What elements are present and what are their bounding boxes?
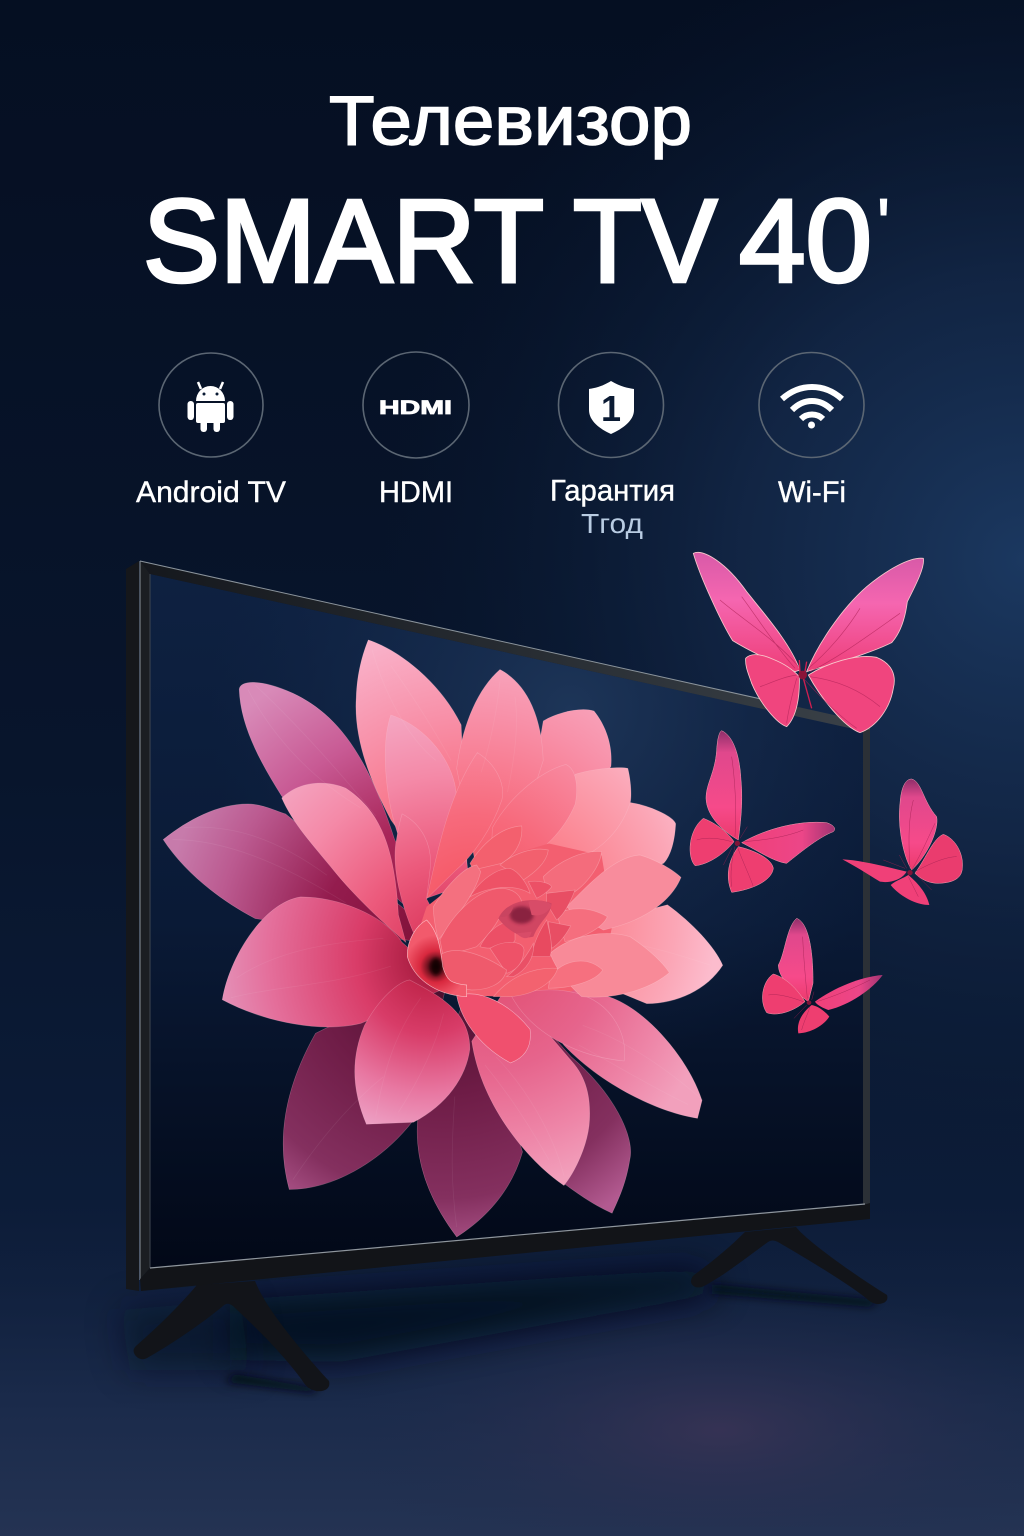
petal veins (173, 650, 711, 1227)
feature: HDMI: HDMI (379, 398, 452, 419)
flower (163, 640, 723, 1237)
butterfly: right (842, 779, 963, 905)
floor shadow (120, 1268, 880, 1393)
tv frame (126, 561, 870, 1291)
butterfly: bottom (762, 918, 883, 1033)
title (143, 82, 890, 308)
TV (126, 561, 870, 1291)
feature: warranty: Гарантия (550, 474, 675, 508)
cup petal with dark throat (407, 920, 467, 997)
title: Телевизор (329, 82, 692, 160)
feature: warranty: Tгод (581, 508, 643, 539)
butterfly: large top (693, 552, 924, 733)
feature: warranty (550, 352, 675, 539)
back petals (163, 640, 723, 1237)
inner petals (407, 826, 681, 997)
title: ' (877, 184, 890, 260)
feature: HDMI: HDMI (379, 476, 453, 509)
feature row (136, 352, 864, 539)
title: TV (573, 176, 717, 308)
feature: Wi-Fi (759, 352, 864, 509)
feature: Android TV: Android TV (136, 476, 286, 509)
title: SMART (143, 176, 544, 308)
right leg (691, 1227, 887, 1304)
middle petals (222, 715, 631, 1186)
butterflies (690, 552, 963, 1033)
feature: Android TV (136, 353, 286, 509)
feature: warranty: 1 (601, 388, 621, 429)
tv screen (150, 574, 863, 1268)
feature: HDMI (363, 352, 469, 509)
left leg (134, 1281, 329, 1391)
feature: Wi-Fi: Wi-Fi (778, 476, 846, 509)
TV stand legs (134, 1227, 887, 1391)
butterfly: middle left (690, 731, 835, 892)
title: 40 (739, 176, 872, 308)
flower core (498, 900, 552, 938)
